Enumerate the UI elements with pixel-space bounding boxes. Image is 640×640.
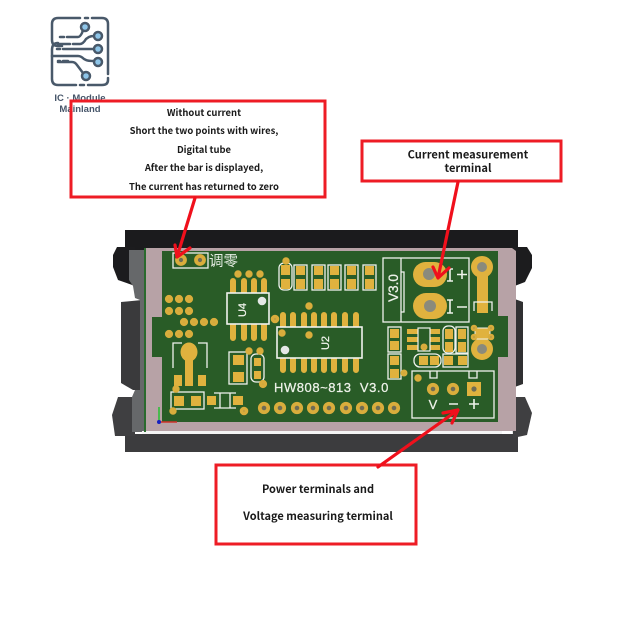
lower left components: [171, 387, 246, 413]
meter housing: [112, 230, 532, 452]
top bar: [125, 230, 518, 250]
arrow: to current terminal: [433, 182, 458, 278]
logo circuit icon: [52, 18, 108, 85]
callout: zero calibration box: After the bar is displayed,: [144, 160, 263, 174]
callout: zero calibration box: Without current: [167, 105, 241, 119]
logo text: Mainland: [59, 104, 101, 115]
logo: IC Module Mainland: [52, 18, 108, 115]
power connector footprint: [412, 371, 494, 418]
board model label: HW808~813 V3.0: [274, 380, 389, 395]
chip U4: U4: [237, 303, 249, 317]
bottom bar: [125, 434, 518, 452]
callout: power and voltage terminals: [216, 465, 416, 544]
callout: power and voltage terminals: Voltage measuring terminal: [242, 508, 393, 524]
right side solder tab: [473, 259, 492, 357]
arrow: to zero adjust pads: [175, 198, 195, 257]
mid capacitor pads: [229, 349, 265, 386]
logo text: IC · Module: [54, 93, 106, 104]
callout: zero calibration box: [71, 101, 325, 197]
right clips: [512, 247, 532, 438]
transistor footprint: [173, 342, 207, 386]
chip U2: [277, 304, 362, 370]
top capacitor pads: [279, 259, 376, 290]
callout: current measurement terminal: [362, 141, 561, 181]
current terminal footprint: [383, 258, 469, 322]
left via cluster: [167, 297, 216, 336]
regulator section components: [388, 326, 468, 379]
callout: power and voltage terminals: Power terminals and: [262, 481, 374, 497]
left clips: [112, 247, 145, 436]
circuit board: [144, 248, 516, 432]
white strip at bottom of frame: [142, 431, 502, 434]
green PCB: [152, 251, 508, 422]
callout: current measurement terminal: Current measurement: [408, 146, 529, 162]
chip U4: [227, 272, 277, 338]
current terminal footprint: V3.0: [386, 274, 401, 302]
via row: [260, 404, 398, 412]
callout: zero calibration box: Short the two points with wires,: [130, 123, 278, 137]
power connector footprint: V: [429, 397, 438, 412]
zero adjust pads: [173, 253, 238, 270]
zero adjust pads: 调零: [209, 253, 238, 270]
arrow: to power terminal: [378, 410, 458, 467]
callout: current measurement terminal: terminal: [445, 160, 492, 176]
axis gizmo: [157, 407, 177, 424]
board frame: [146, 248, 516, 431]
chip U2: U2: [320, 336, 332, 350]
callout: zero calibration box: The current has returned to zero: [129, 179, 279, 193]
callout: zero calibration box: Digital tube: [177, 142, 232, 156]
